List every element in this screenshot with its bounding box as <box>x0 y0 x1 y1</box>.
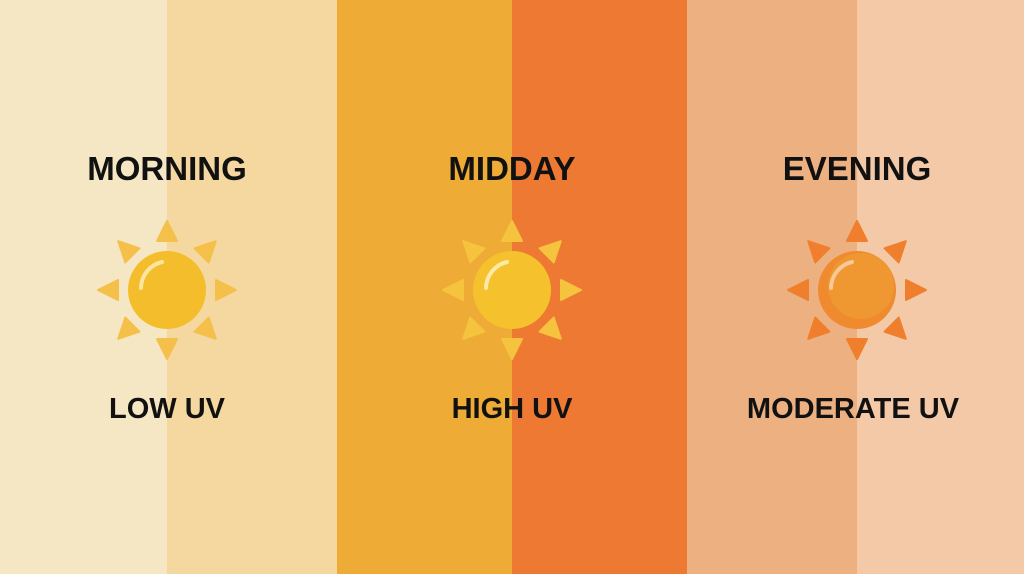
heading: morning: MORNING <box>87 150 247 187</box>
panel: evening <box>747 150 960 425</box>
label: high uv: HIGH UV <box>452 393 573 425</box>
icon: morning sun <box>98 221 236 359</box>
label: moderate uv: MODERATE UV <box>747 393 960 425</box>
panel: morning <box>87 150 247 425</box>
heading: midday: MIDDAY <box>448 150 576 187</box>
icon: evening sun <box>788 221 926 359</box>
heading: evening: EVENING <box>783 150 931 187</box>
icon: midday sun <box>443 221 581 359</box>
panel: midday <box>443 150 581 425</box>
label: low uv: LOW UV <box>109 393 226 425</box>
